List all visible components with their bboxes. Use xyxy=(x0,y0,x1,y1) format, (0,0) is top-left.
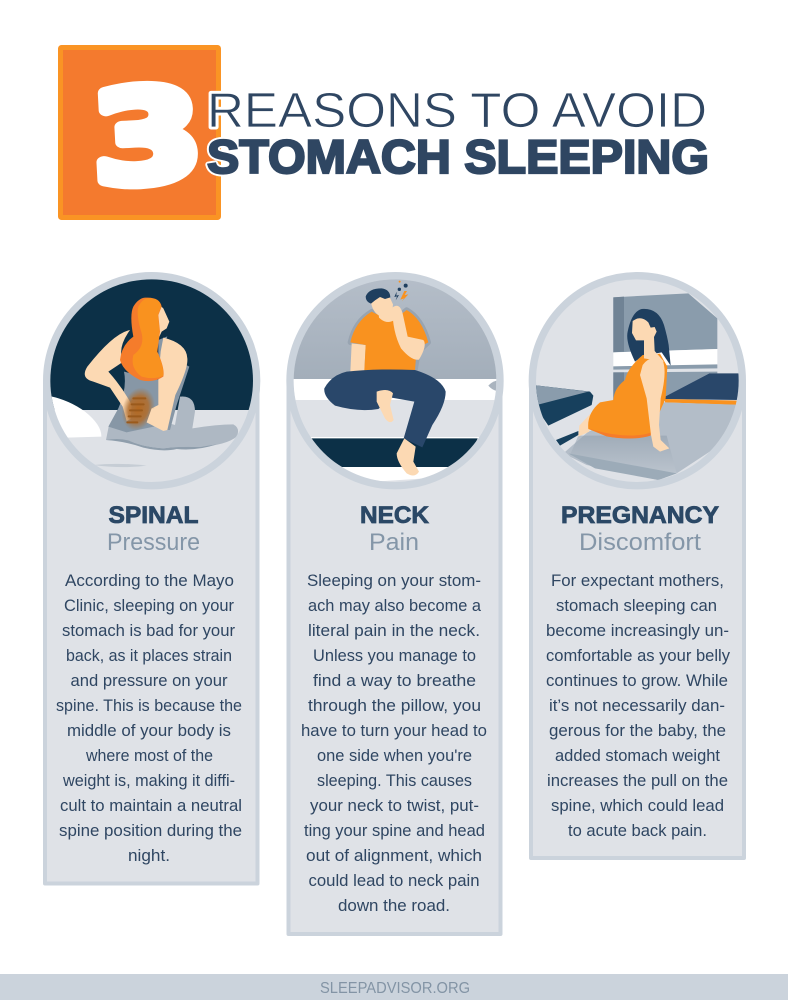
body text: stomach sleeping can xyxy=(556,596,717,615)
body text: where most of the xyxy=(85,746,213,765)
body text: Sleeping on your stom- xyxy=(307,571,481,590)
body text: sleeping. This causes xyxy=(317,771,472,790)
body text xyxy=(301,571,487,915)
title: STOMACH SLEEPING xyxy=(207,130,709,183)
body text: could lead to neck pain xyxy=(308,871,480,890)
card background xyxy=(531,380,744,858)
body text xyxy=(56,571,242,865)
subheading: Pain xyxy=(369,529,419,556)
panel: spinal pressure xyxy=(43,275,260,884)
footer bar xyxy=(0,974,788,1000)
body text: added stomach weight xyxy=(555,746,720,765)
badge: orange square xyxy=(60,48,218,218)
body text xyxy=(546,571,730,840)
body text: it’s not necessarily dan- xyxy=(549,696,725,715)
body text: spine. This is because the xyxy=(56,696,242,715)
body text: out of alignment, which xyxy=(306,846,482,865)
heading: SPINAL xyxy=(108,502,198,529)
footer text: SLEEPADVISOR.ORG xyxy=(320,980,470,997)
body text: ting your spine and head xyxy=(304,821,485,840)
body text: down the road. xyxy=(338,896,450,915)
body text: weight is, making it diffi- xyxy=(62,771,235,790)
body text: According to the Mayo xyxy=(65,571,234,590)
heading: NECK xyxy=(360,502,430,529)
body text: ach may also become a xyxy=(308,596,482,615)
illustration: man holding his neck xyxy=(288,275,505,486)
body text: through the pillow, you xyxy=(308,696,481,715)
body text: comfortable as your belly xyxy=(546,646,730,665)
title: REASONS TO AVOID xyxy=(207,84,707,138)
body text: your neck to twist, put- xyxy=(310,796,479,815)
body text: literal pain in the neck. xyxy=(308,621,480,640)
badge numeral 3: 3 xyxy=(88,60,206,214)
card background xyxy=(288,380,500,934)
illustration: pregnant woman sitting on a bed xyxy=(532,276,747,486)
body text: spine position during the xyxy=(59,821,242,840)
body text: have to turn your head to xyxy=(301,721,487,740)
subheading: Pressure xyxy=(107,529,200,556)
body text: back, as it places strain xyxy=(66,646,232,665)
body text: spine, which could lead xyxy=(551,796,724,815)
subheading: Discomfort xyxy=(579,529,701,556)
body text: Unless you manage to xyxy=(313,646,476,665)
heading: PREGNANCY xyxy=(561,502,719,529)
body text: middle of your body is xyxy=(67,721,231,740)
title: REASONS TO AVOID xyxy=(207,84,707,138)
body text: one side when you're xyxy=(317,746,472,765)
body text: become increasingly un- xyxy=(546,621,729,640)
body text: gerous for the baby, the xyxy=(549,721,726,740)
panel: neck pain xyxy=(288,275,505,934)
illustration: woman holding her back xyxy=(43,275,260,486)
body text: stomach is bad for your xyxy=(62,621,235,640)
card background xyxy=(45,380,258,884)
title xyxy=(207,84,709,183)
body text: find a way to breathe xyxy=(313,671,476,690)
panel: pregnancy discomfort xyxy=(531,276,747,858)
title: STOMACH SLEEPING xyxy=(207,130,709,183)
body text: night. xyxy=(128,846,170,865)
body text: For expectant mothers, xyxy=(551,571,724,590)
body text: to acute back pain. xyxy=(568,821,707,840)
body text: increases the pull on the xyxy=(547,771,728,790)
body text: and pressure on your xyxy=(70,671,228,690)
body text: Clinic, sleeping on your xyxy=(64,596,234,615)
body text: continues to grow. While xyxy=(546,671,728,690)
body text: cult to maintain a neutral xyxy=(60,796,242,815)
